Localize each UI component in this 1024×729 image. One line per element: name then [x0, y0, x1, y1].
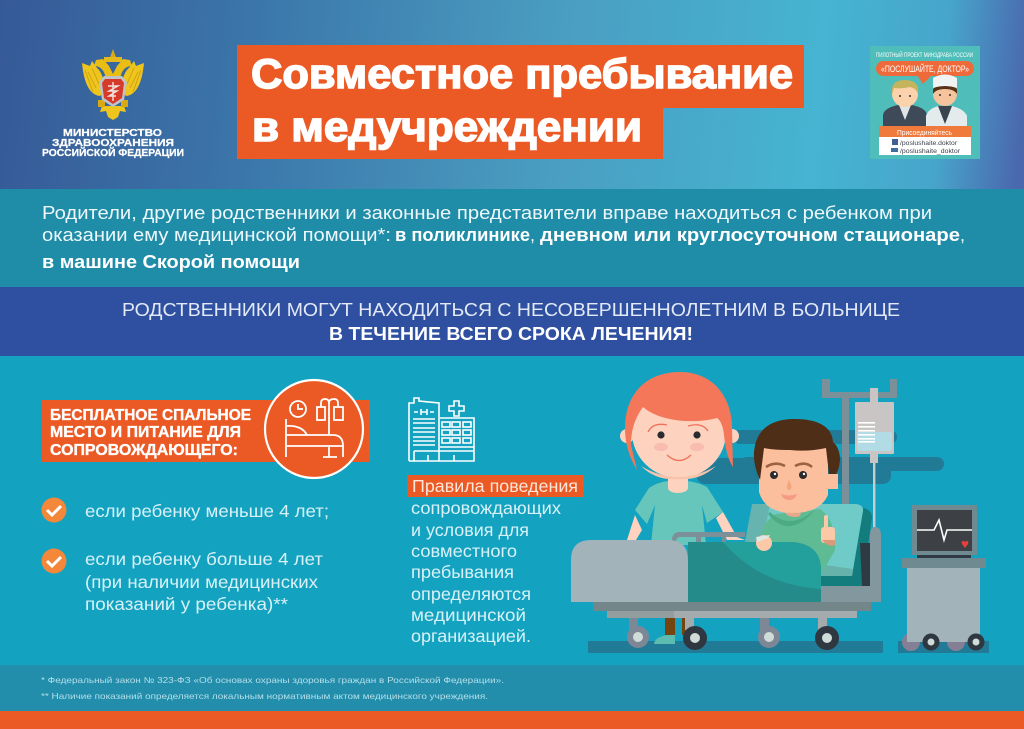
text block: rules of conduct: совместного: [411, 541, 517, 561]
text: heading: СОПРОВОЖДАЮЩЕГО:: [50, 442, 238, 459]
text block: intro: оказании ему медицинской помощи*:: [42, 225, 391, 245]
list item: over 4 years: если ребенку больше 4 лет: [85, 549, 323, 569]
text block: rules of conduct: пребывания: [411, 562, 514, 582]
text block: footnotes: * Федеральный закон № 323-ФЗ «Об основах охраны здоровья граждан в Российской Федерации».: [41, 675, 504, 685]
social links: [879, 137, 971, 155]
title: [237, 45, 804, 159]
background bars: [588, 430, 989, 653]
illustration: hospital room: [571, 372, 989, 653]
title: в медучреждении: [252, 103, 642, 150]
panel: project badge: [870, 46, 980, 159]
list item: under 4 years: [42, 498, 329, 522]
text block: intro: в машине Скорой помощи: [42, 252, 300, 272]
list item: over 4 years: [42, 548, 323, 614]
text block: rules of conduct: [407, 475, 584, 646]
icon: left doctor: [883, 80, 927, 127]
social links: /poslushaite.doktor: [900, 140, 958, 147]
text block: rules of conduct: сопровождающих: [411, 498, 561, 518]
text: badge caption: ПИЛОТНЫЙ ПРОЕКТ МИНЗДРАВА РОССИИ: [876, 50, 973, 59]
panel: header background: [0, 0, 1024, 189]
text block: intro: Родители, другие родственники и законные представители вправе находиться с ребенком при: [42, 203, 932, 223]
panel: intro band: [0, 189, 1024, 287]
text: ministry name: ЗДРАВООХРАНЕНИЯ: [52, 137, 174, 149]
text block: rules of conduct: организацией.: [411, 626, 531, 646]
text block: rules of conduct: и условия для: [411, 520, 529, 540]
IV stand: [822, 379, 897, 530]
panel: footnotes band: [0, 665, 1024, 711]
text block: footnotes: ** Наличие показаний определяется локальным нормативным актом медицинского учреждения.: [41, 691, 488, 701]
icon: check: [42, 498, 66, 522]
social links: /poslushaite_doktor: [900, 148, 961, 155]
text block: footnotes: [41, 675, 504, 701]
icon: double-headed eagle: [82, 49, 144, 120]
icon: check: [42, 548, 66, 574]
panel: orange footer: [0, 711, 1024, 729]
text block: blue band message: РОДСТВЕННИКИ МОГУТ НАХОДИТЬСЯ С НЕСОВЕРШЕННОЛЕТНИМ В БОЛЬНИЦЕ: [122, 299, 900, 320]
panel: blue band: [0, 287, 1024, 356]
bed backrest: [745, 504, 872, 586]
heart monitor: [902, 505, 986, 651]
list item: over 4 years: показаний у ребенка)**: [85, 594, 288, 614]
panel: free bed and food heading: [42, 380, 370, 478]
text block: intro: [42, 203, 965, 272]
icon: right doctor: [926, 74, 967, 127]
text block: rules of conduct: определяются: [411, 584, 531, 604]
text block: intro: в поликлинике: [395, 225, 530, 245]
panel: main area: [0, 356, 1024, 665]
text block: blue band message: [122, 299, 900, 344]
text: heading: БЕСПЛАТНОЕ СПАЛЬНОЕ: [50, 407, 251, 424]
text: ministry name: РОССИЙСКОЙ ФЕДЕРАЦИИ: [42, 146, 184, 159]
list item: over 4 years: (при наличии медицинских: [85, 572, 318, 592]
join bar: Присоединяйтесь: [897, 128, 952, 137]
hand: [756, 535, 772, 551]
blanket: [688, 542, 821, 606]
text block: intro: ,: [530, 225, 535, 245]
label: rules: Правила поведения: [412, 476, 578, 496]
text: heading: [50, 407, 251, 459]
list item: under 4 years: если ребенку меньше 4 лет;: [85, 501, 329, 521]
text block: blue band message: В ТЕЧЕНИЕ ВСЕГО СРОКА ЛЕЧЕНИЯ!: [329, 323, 693, 344]
icon: hospital building: [409, 398, 474, 461]
character: boy: [754, 419, 840, 586]
logo: ministry of health: [42, 49, 184, 159]
bed wheels: [627, 618, 839, 650]
bed frame: [571, 527, 881, 618]
text: ministry name: МИНИСТЕРСТВО: [63, 127, 162, 139]
text: heading: МЕСТО И ПИТАНИЕ ДЛЯ: [50, 424, 241, 441]
speech bubble: «ПОСЛУШАЙТЕ, ДОКТОР»: [881, 63, 969, 75]
icon: bed with clock and IV stand: [265, 380, 363, 478]
text block: intro: дневном или круглосуточном стационаре: [540, 225, 960, 245]
character: woman: [620, 372, 745, 644]
text block: intro: ,: [960, 225, 965, 245]
text: ministry name: [42, 127, 184, 159]
text block: rules of conduct: медицинской: [411, 605, 526, 625]
title: Совместное пребывание: [251, 50, 793, 97]
